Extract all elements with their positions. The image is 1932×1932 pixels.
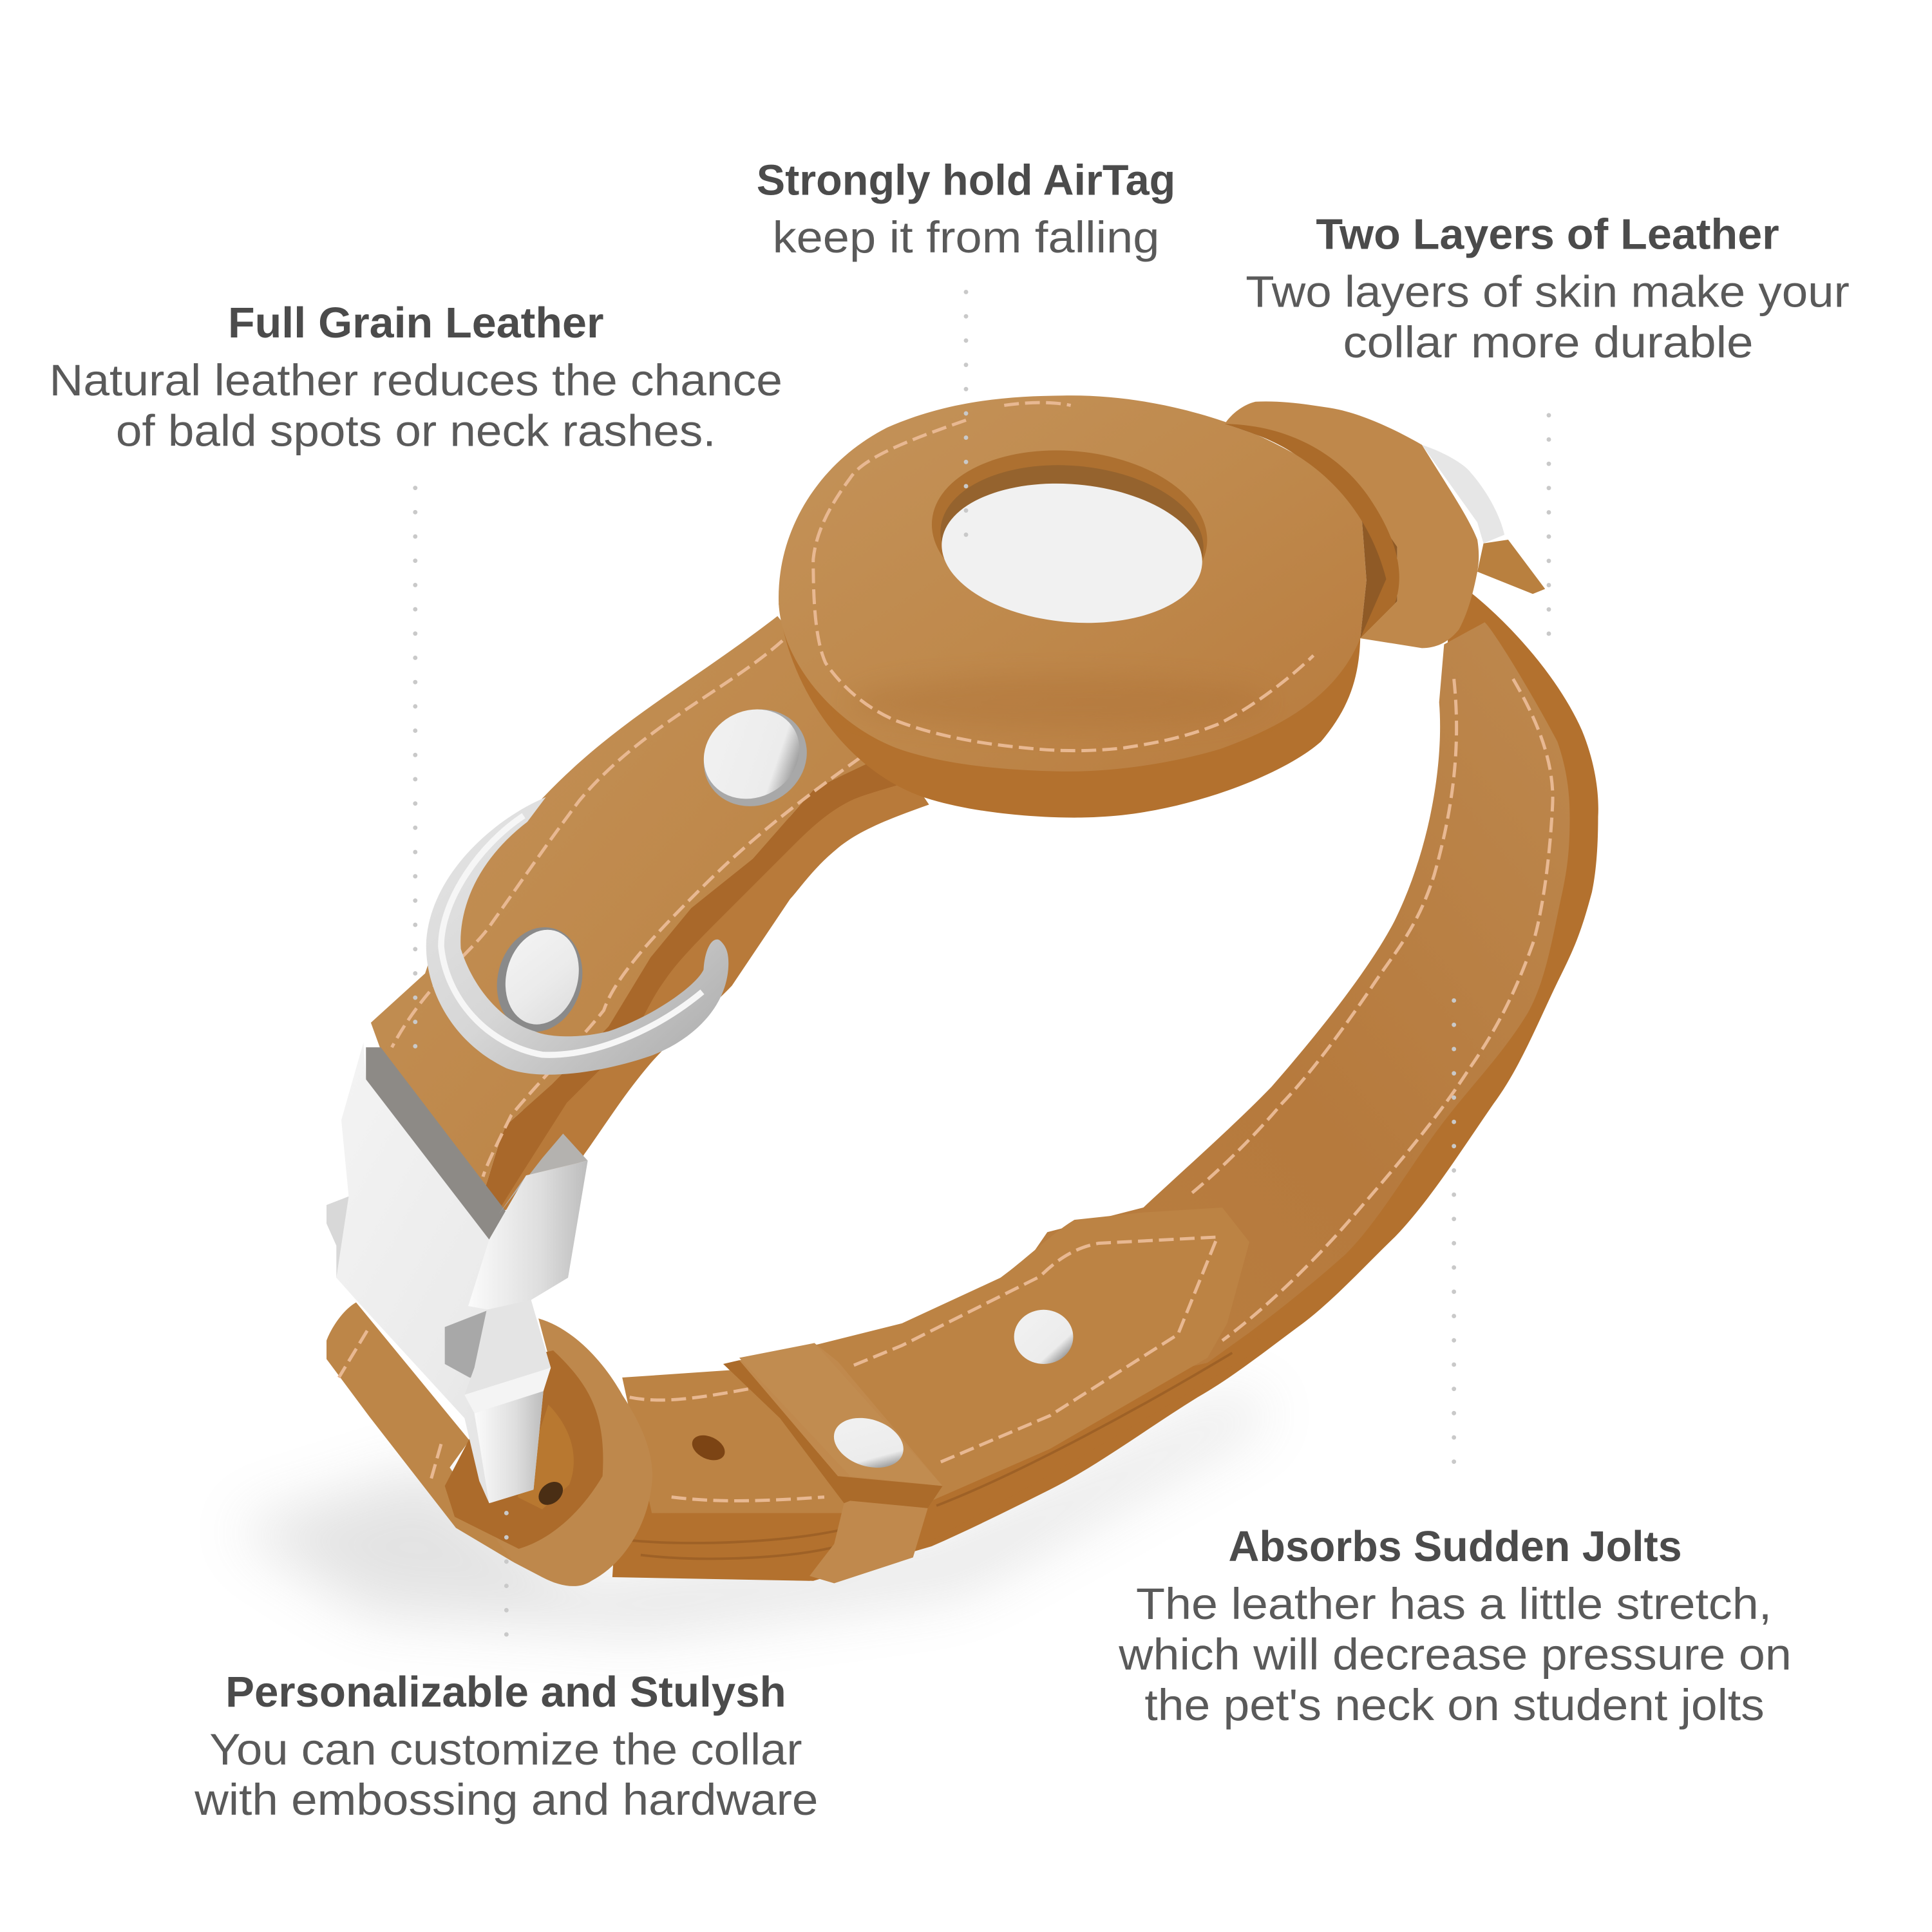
lower strap with pin xyxy=(622,1208,1249,1513)
loop stitching xyxy=(339,1331,441,1479)
pocket shading xyxy=(850,675,1269,730)
pocket stitching xyxy=(813,402,1314,751)
buckle xyxy=(327,1043,588,1503)
D-ring xyxy=(426,797,728,1075)
callout: Personalizable and Stulysh: Personalizable and Stulysh xyxy=(225,1668,786,1716)
loop edge xyxy=(1225,424,1399,638)
callout: Absorbs Sudden Jolts: which will decrease pressure on xyxy=(1118,1629,1792,1679)
strap stitching xyxy=(630,1237,1217,1501)
loop tail xyxy=(1477,540,1545,594)
band stitching xyxy=(1188,679,1457,1197)
strap underside xyxy=(487,739,929,1214)
strap thick edge xyxy=(486,755,918,1214)
callout: Full Grain Leather: Natural leather reduces the chance xyxy=(50,355,782,405)
main band: back and right side xyxy=(612,589,1598,1581)
pocket hole inner xyxy=(934,455,1209,625)
callout: Two Layers of Leather xyxy=(1245,210,1850,367)
callout: Full Grain Leather: of bald spots or neck rashes. xyxy=(116,406,716,456)
callout: Strongly hold AirTag xyxy=(757,156,1175,262)
AirTag disc xyxy=(936,473,1208,633)
keeper rivet xyxy=(828,1410,910,1476)
callout: Personalizable and Stulysh: You can customize the collar xyxy=(209,1725,802,1774)
lower strap layered edges xyxy=(612,1334,1269,1581)
callout: Absorbs Sudden Jolts: the pet's neck on student jolts xyxy=(1144,1680,1765,1730)
pocket face xyxy=(779,395,1367,772)
callout: Full Grain Leather xyxy=(50,299,782,456)
buckle side tab xyxy=(327,1197,370,1294)
callout: Strongly hold AirTag: keep it from falling xyxy=(773,213,1159,262)
pocket edge xyxy=(779,579,1360,818)
rivet lower xyxy=(486,918,594,1041)
loop rivet xyxy=(1422,445,1504,544)
pocket hole rim xyxy=(925,439,1214,625)
callout: Personalizable and Stulysh: with embossing and hardware xyxy=(194,1775,818,1824)
collar shadow xyxy=(234,1392,1269,1633)
keeper loop with rivet xyxy=(723,1343,943,1584)
buckle back loop xyxy=(327,1302,652,1586)
buckle window xyxy=(366,1047,507,1244)
top right loop xyxy=(1225,401,1545,648)
loop opening xyxy=(534,1477,567,1510)
buckle hinge xyxy=(445,1310,489,1380)
callout: Two Layers of Leather: collar more durable xyxy=(1343,317,1754,367)
band outer edge xyxy=(612,589,1598,1581)
loop body xyxy=(1225,401,1479,648)
callout: Absorbs Sudden Jolts: Absorbs Sudden Jolts xyxy=(1229,1522,1682,1571)
band face xyxy=(912,622,1570,1429)
strap hole xyxy=(688,1430,729,1465)
strap pin xyxy=(1014,1310,1073,1364)
buckle shoulder xyxy=(468,1160,588,1310)
buckle tip xyxy=(475,1391,544,1503)
strap face xyxy=(371,616,885,1213)
collar illustration xyxy=(327,395,1598,1586)
callout: Absorbs Sudden Jolts: The leather has a little stretch, xyxy=(1136,1579,1772,1629)
callout: Two Layers of Leather: Two Layers of Leather xyxy=(1316,210,1779,258)
callout: Full Grain Leather: Full Grain Leather xyxy=(228,299,604,347)
strap stitching xyxy=(392,641,782,1047)
buckle right bar xyxy=(499,1133,588,1214)
callout: Strongly hold AirTag: Strongly hold AirTag xyxy=(757,156,1175,204)
loop inner shadow xyxy=(1225,424,1397,638)
rivet upper xyxy=(686,691,824,825)
callout: Personalizable and Stulysh xyxy=(194,1668,818,1824)
buckle tip band xyxy=(464,1368,551,1414)
AirTag pocket xyxy=(779,395,1367,818)
upper strap with rivets xyxy=(371,616,929,1214)
callout: Absorbs Sudden Jolts xyxy=(1118,1522,1792,1730)
buckle body xyxy=(336,1043,588,1503)
buckle neck xyxy=(464,1300,551,1395)
leader lines xyxy=(415,292,1549,1639)
callout: Two Layers of Leather: Two layers of skin make your xyxy=(1245,267,1850,316)
